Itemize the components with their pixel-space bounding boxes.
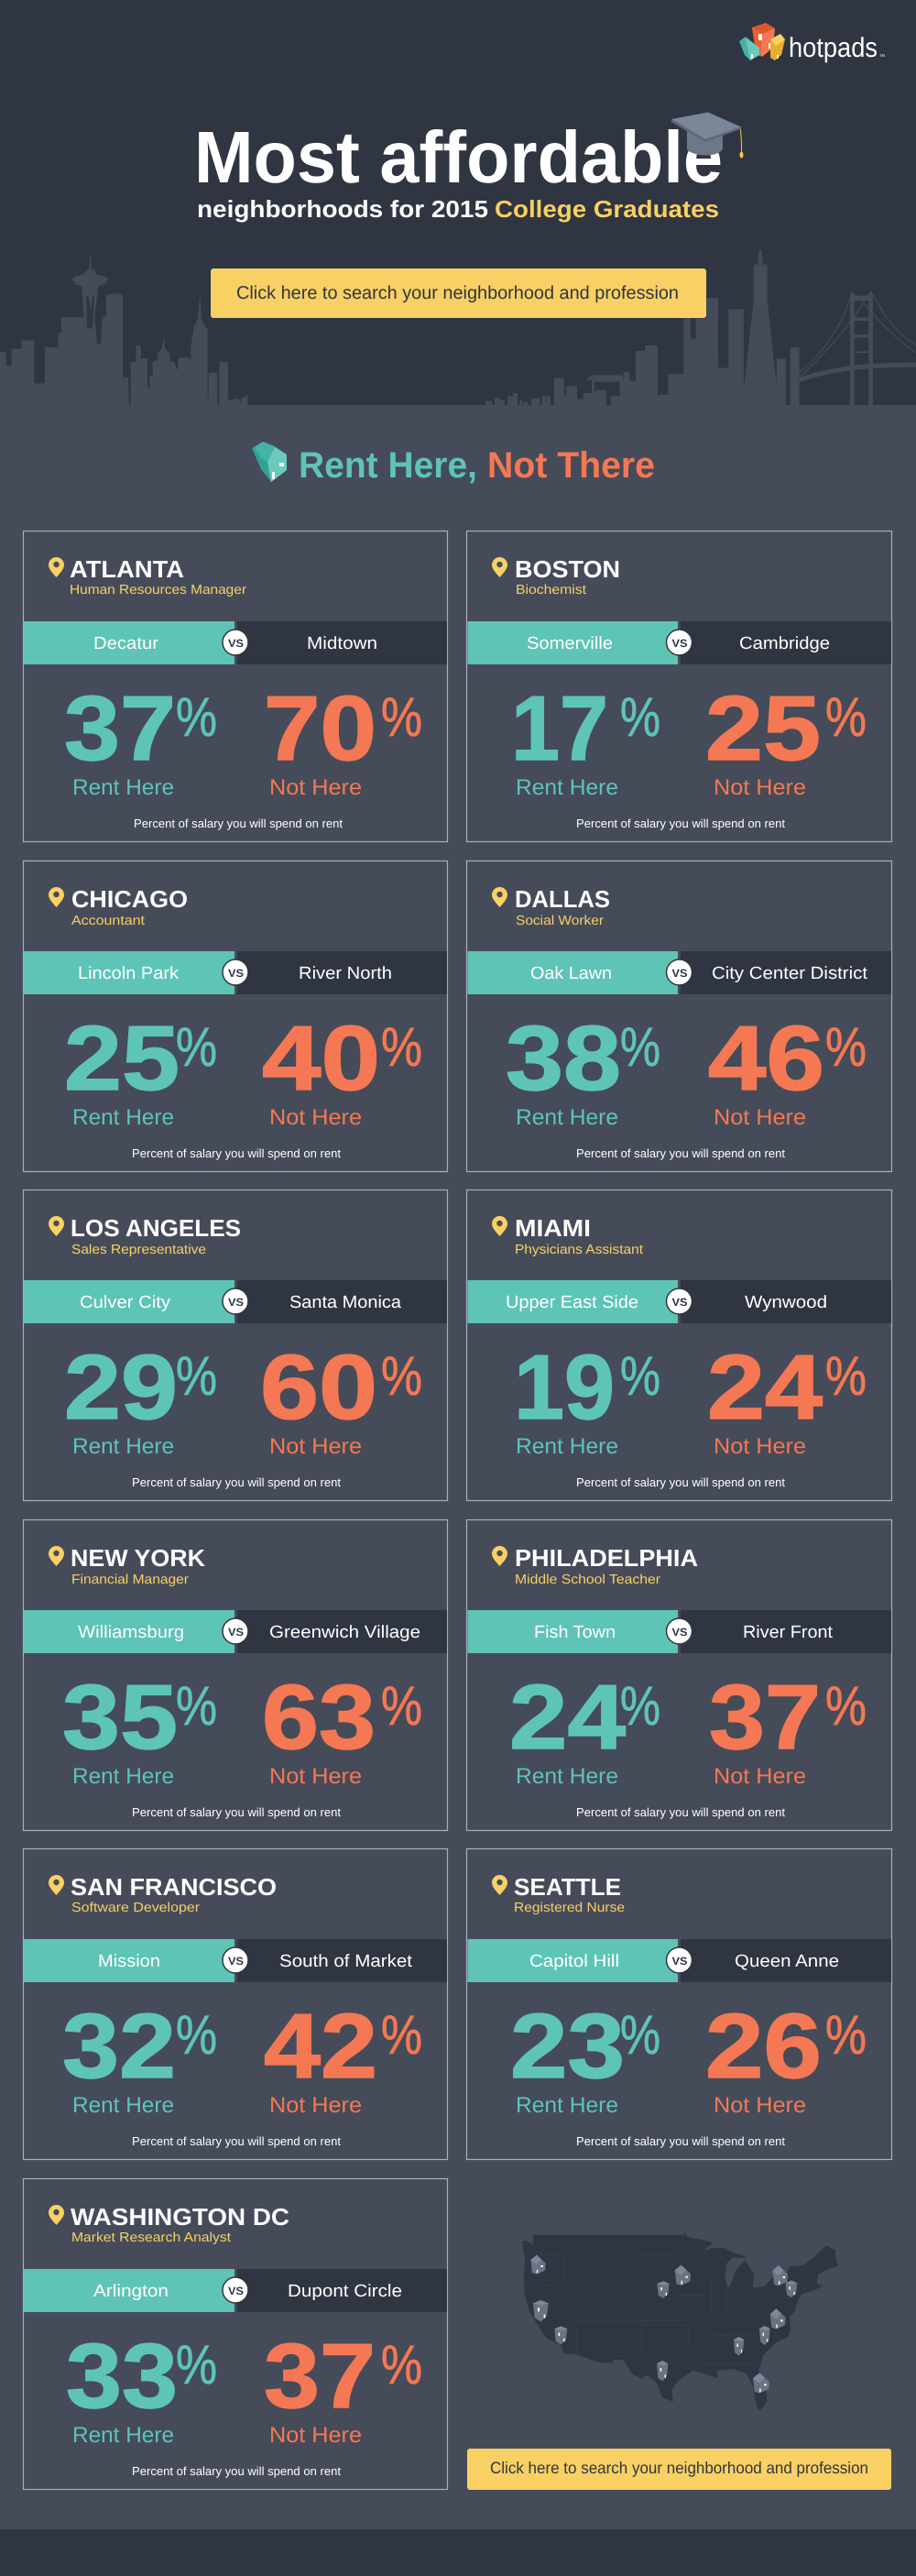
subtitle: neighborhoods for 2015 <box>197 195 488 223</box>
stat: rent here: Rent Here <box>516 775 618 800</box>
city and profession <box>71 1544 205 1587</box>
versus bar: Capitol Hill <box>529 1952 619 1971</box>
versus bar: VS <box>672 1955 687 1968</box>
stat: rent here: 38 <box>506 1007 621 1110</box>
stat: rent here <box>506 1007 660 1130</box>
marker: Philadelphia and New York <box>772 2265 788 2286</box>
stat: not here: Not Here <box>714 775 806 800</box>
stat: not here: 26 <box>705 1995 822 2098</box>
stat: not here <box>705 1995 867 2118</box>
stat: rent here <box>64 1007 217 1130</box>
versus bar: VS <box>228 967 244 980</box>
stat: rent here <box>510 1995 660 2118</box>
city and profession: Human Resources Manager <box>70 583 246 597</box>
stat: not here: 60 <box>260 1336 377 1439</box>
panel: Los Angeles <box>24 1189 447 1501</box>
stat: rent here: 25 <box>64 1007 180 1110</box>
city and profession: MIAMI <box>515 1214 591 1242</box>
stat: not here: 63 <box>262 1666 376 1769</box>
versus bar: VS <box>672 1626 687 1639</box>
stat: rent here: % <box>176 2004 217 2066</box>
stat: not here: % <box>381 1016 422 1078</box>
subtitle: College Graduates <box>495 195 719 223</box>
note: Percent of salary you will spend on rent <box>132 1146 341 1160</box>
button: top search call to action <box>211 269 706 318</box>
stat: rent here: % <box>620 686 660 748</box>
stat: not here <box>707 1336 867 1459</box>
stat: rent here: Rent Here <box>72 1105 174 1130</box>
marker: Dallas <box>657 2361 668 2381</box>
versus bar <box>467 1939 891 1982</box>
stat: rent here: 29 <box>64 1336 178 1439</box>
stat: rent here: Rent Here <box>516 1434 618 1459</box>
stat: rent here: % <box>176 1016 217 1078</box>
stat: rent here <box>64 677 217 800</box>
skyline: Seattle and New York <box>0 255 247 405</box>
city and profession <box>71 885 188 928</box>
versus bar: South of Market <box>279 1952 413 1971</box>
stat: not here: 37 <box>264 2325 376 2428</box>
city and profession: BOSTON <box>515 555 620 583</box>
marker: Midwest <box>657 2281 670 2298</box>
note: Percent of salary you will spend on rent <box>576 2134 785 2148</box>
stat: not here <box>709 1666 867 1789</box>
icon: teal house <box>252 442 287 482</box>
stat: not here: % <box>381 1345 422 1407</box>
stat: not here <box>264 2325 422 2448</box>
stat: rent here: Rent Here <box>516 1105 618 1130</box>
note: Percent of salary you will spend on rent <box>132 1475 341 1489</box>
icon: teal house <box>739 37 759 60</box>
stat: not here: Not Here <box>269 1764 362 1789</box>
panel: Dallas <box>467 861 892 1171</box>
stat: rent here: 23 <box>510 1995 625 2098</box>
panel: Atlanta <box>24 532 447 841</box>
stat: rent here <box>509 1666 660 1789</box>
stat: not here: 46 <box>708 1007 824 1110</box>
city and profession: SEATTLE <box>514 1873 621 1901</box>
city and profession: Financial Manager <box>71 1573 189 1587</box>
icon: graduation cap <box>671 112 744 158</box>
stat: not here: 40 <box>262 1007 380 1110</box>
stat: not here: % <box>381 2334 422 2395</box>
panel: Chicago <box>24 861 447 1171</box>
city and profession: CHICAGO <box>71 885 188 913</box>
city and profession: PHILADELPHIA <box>515 1544 698 1572</box>
marker: San Francisco <box>533 2300 549 2321</box>
city and profession: DALLAS <box>515 885 610 913</box>
stat: not here: % <box>825 1345 867 1407</box>
note: Percent of salary you will spend on rent <box>576 1475 785 1489</box>
stat: not here <box>264 677 422 800</box>
stat: not here: Not Here <box>714 1764 806 1789</box>
city and profession: Registered Nurse <box>514 1901 625 1915</box>
stat: rent here <box>62 1666 217 1789</box>
city and profession: Market Research Analyst <box>71 2231 231 2245</box>
stat: not here: % <box>825 1675 867 1737</box>
versus bar: Midtown <box>307 634 377 653</box>
stat: not here: % <box>825 2004 867 2066</box>
versus bar: Santa Monica <box>289 1293 401 1312</box>
trademark: TM <box>879 53 885 58</box>
note: Percent of salary you will spend on rent <box>134 817 343 830</box>
versus bar: Queen Anne <box>735 1952 839 1971</box>
note: Percent of salary you will spend on rent <box>576 1805 785 1819</box>
city and profession <box>515 555 620 597</box>
marker: Minneapolis <box>675 2265 691 2286</box>
stat: rent here: Rent Here <box>72 1434 174 1459</box>
city and profession: LOS ANGELES <box>71 1214 241 1242</box>
stat: rent here: 19 <box>514 1336 615 1439</box>
versus bar: Upper East Side <box>506 1293 638 1312</box>
city and profession <box>514 1873 625 1915</box>
button: bottom search call to action: Click here to search your neighborhood and profession <box>490 2459 868 2477</box>
stat: not here: Not Here <box>714 1434 806 1459</box>
stat: not here <box>260 1336 422 1459</box>
stat: not here: Not Here <box>714 1105 806 1130</box>
stat: rent here: % <box>176 1345 217 1407</box>
versus bar <box>24 1939 447 1982</box>
city and profession: Accountant <box>71 914 145 928</box>
stat: rent here: Rent Here <box>516 1764 618 1789</box>
versus bar <box>24 1280 447 1323</box>
versus bar: VS <box>228 1296 244 1309</box>
logo: hotpads <box>739 23 885 63</box>
marker: Charlotte <box>759 2326 770 2345</box>
stat: rent here: % <box>176 1675 217 1737</box>
icon: yellow building <box>770 34 785 60</box>
stat: not here: Not Here <box>269 2423 362 2448</box>
city and profession: ATLANTA <box>70 555 184 583</box>
stat: not here: Not Here <box>714 2093 806 2118</box>
section heading: Rent Here, Not There <box>252 442 655 486</box>
city and profession: Social Worker <box>516 914 604 928</box>
stat: rent here: % <box>620 1345 660 1407</box>
versus bar: Williamsburg <box>78 1623 184 1642</box>
stat: not here: Not Here <box>269 775 362 800</box>
panel: Seattle <box>467 1849 892 2159</box>
versus bar: VS <box>672 1296 687 1309</box>
city and profession <box>71 1214 241 1257</box>
versus bar <box>24 1610 447 1653</box>
marker: Atlanta <box>734 2337 744 2356</box>
city and profession <box>71 2203 289 2245</box>
versus bar: Decatur <box>93 634 159 653</box>
button: bottom search call to action <box>467 2449 891 2490</box>
stat: rent here: 37 <box>64 677 176 780</box>
versus bar: Arlington <box>93 2282 169 2301</box>
city and profession: WASHINGTON DC <box>71 2203 289 2231</box>
versus bar: Cambridge <box>739 634 830 653</box>
stat: not here: % <box>381 686 422 748</box>
stat: rent here: % <box>620 2004 660 2066</box>
stat: not here: % <box>825 686 867 748</box>
versus bar: Fish Town <box>534 1623 616 1642</box>
stat: rent here: 24 <box>509 1666 626 1769</box>
skyline: San Francisco with bridge <box>485 249 916 405</box>
versus bar <box>467 1610 891 1653</box>
versus bar: Culver City <box>80 1293 171 1312</box>
versus bar <box>467 951 891 994</box>
marker: Seattle <box>530 2255 546 2275</box>
versus bar: VS <box>228 1626 244 1639</box>
stat: not here <box>264 1995 422 2118</box>
city and profession <box>515 885 610 928</box>
stat: rent here <box>514 1336 660 1459</box>
map: United States with city markers <box>522 2232 838 2411</box>
city and profession: Physicians Assistant <box>515 1243 643 1257</box>
versus bar: River North <box>299 964 392 983</box>
stat: not here <box>262 1666 422 1789</box>
city and profession <box>71 1873 277 1915</box>
versus bar <box>24 621 447 664</box>
city and profession <box>515 1544 698 1587</box>
stat: rent here: Rent Here <box>72 2423 174 2448</box>
marker: Los Angeles <box>554 2326 567 2344</box>
panel: Boston <box>467 532 892 841</box>
stat: not here: Not Here <box>269 2093 362 2118</box>
note: Percent of salary you will spend on rent <box>576 817 785 830</box>
stat: rent here: Rent Here <box>72 1764 174 1789</box>
stat: rent here <box>62 1995 217 2118</box>
heading text: Not There <box>487 445 655 486</box>
versus bar: City Center District <box>712 964 868 983</box>
city and profession: Biochemist <box>516 583 586 597</box>
versus bar <box>467 621 891 664</box>
stat: rent here: Rent Here <box>516 2093 618 2118</box>
stat: not here: % <box>825 1016 867 1078</box>
versus bar: Somerville <box>527 634 613 653</box>
stat: not here: 25 <box>705 677 821 780</box>
button: top search call to action: Click here to search your neighborhood and profession <box>236 283 679 303</box>
versus bar: Dupont Circle <box>288 2282 402 2301</box>
versus bar <box>24 951 447 994</box>
stat: not here: % <box>381 2004 422 2066</box>
versus bar: VS <box>672 967 687 980</box>
panel: Washington DC <box>24 2179 447 2489</box>
city and profession <box>515 1214 643 1257</box>
city and profession: Middle School Teacher <box>515 1573 660 1587</box>
versus bar: VS <box>228 1955 244 1968</box>
stat: not here <box>705 677 867 800</box>
versus bar: Greenwich Village <box>269 1623 420 1642</box>
icon: orange building <box>752 23 775 57</box>
versus bar: Wynwood <box>745 1293 827 1312</box>
marker: Washington DC <box>770 2308 786 2329</box>
stat: not here: Not Here <box>269 1434 362 1459</box>
title: Most affordable <box>194 116 723 198</box>
stat: rent here: Rent Here <box>72 2093 174 2118</box>
note: Percent of salary you will spend on rent <box>576 1146 785 1160</box>
versus bar: Mission <box>98 1952 160 1971</box>
stat: rent here: Rent Here <box>72 775 174 800</box>
marker: Boston <box>786 2281 797 2297</box>
marker: Miami <box>753 2373 769 2394</box>
stat: rent here: 32 <box>62 1995 176 2098</box>
versus bar: River Front <box>743 1623 834 1642</box>
city and profession: Software Developer <box>71 1901 200 1915</box>
panel: San Francisco <box>24 1849 447 2159</box>
stat: rent here <box>511 677 660 800</box>
stat: rent here: % <box>176 686 217 748</box>
note: Percent of salary you will spend on rent <box>132 1805 341 1819</box>
stat: not here: Not Here <box>269 1105 362 1130</box>
stat: not here <box>262 1007 422 1130</box>
city and profession: SAN FRANCISCO <box>71 1873 277 1901</box>
heading text: Rent Here, <box>299 445 477 486</box>
stat: not here: % <box>381 1675 422 1737</box>
panel: New York <box>24 1519 447 1831</box>
versus bar <box>467 1280 891 1323</box>
note: Percent of salary you will spend on rent <box>132 2464 341 2478</box>
stat: not here: 24 <box>707 1336 823 1439</box>
logo wordmark: hotpads <box>789 33 878 63</box>
stat: rent here: 17 <box>511 677 608 780</box>
panel: Philadelphia <box>467 1519 892 1831</box>
stat: rent here <box>64 1336 217 1459</box>
stat: not here <box>708 1007 867 1130</box>
stat: rent here <box>66 2325 217 2448</box>
map outline <box>522 2232 838 2411</box>
stat: not here: 70 <box>264 677 376 780</box>
note: Percent of salary you will spend on rent <box>132 2134 341 2148</box>
stat: rent here: 33 <box>66 2325 178 2428</box>
versus bar: Lincoln Park <box>78 964 180 983</box>
stat: not here: 37 <box>709 1666 821 1769</box>
panel: Miami <box>467 1189 892 1501</box>
versus bar: VS <box>228 2285 244 2297</box>
versus bar: VS <box>672 637 687 650</box>
stat: rent here: 35 <box>62 1666 178 1769</box>
stat: rent here: % <box>620 1016 660 1078</box>
stat: rent here: % <box>620 1675 660 1737</box>
stat: rent here: % <box>176 2334 217 2395</box>
versus bar <box>24 2269 447 2312</box>
stat: not here: 42 <box>264 1995 377 2098</box>
versus bar: VS <box>228 637 244 650</box>
city and profession: NEW YORK <box>71 1544 205 1572</box>
versus bar: Oak Lawn <box>530 964 612 983</box>
city and profession: Sales Representative <box>71 1243 206 1257</box>
city and profession <box>70 555 246 597</box>
